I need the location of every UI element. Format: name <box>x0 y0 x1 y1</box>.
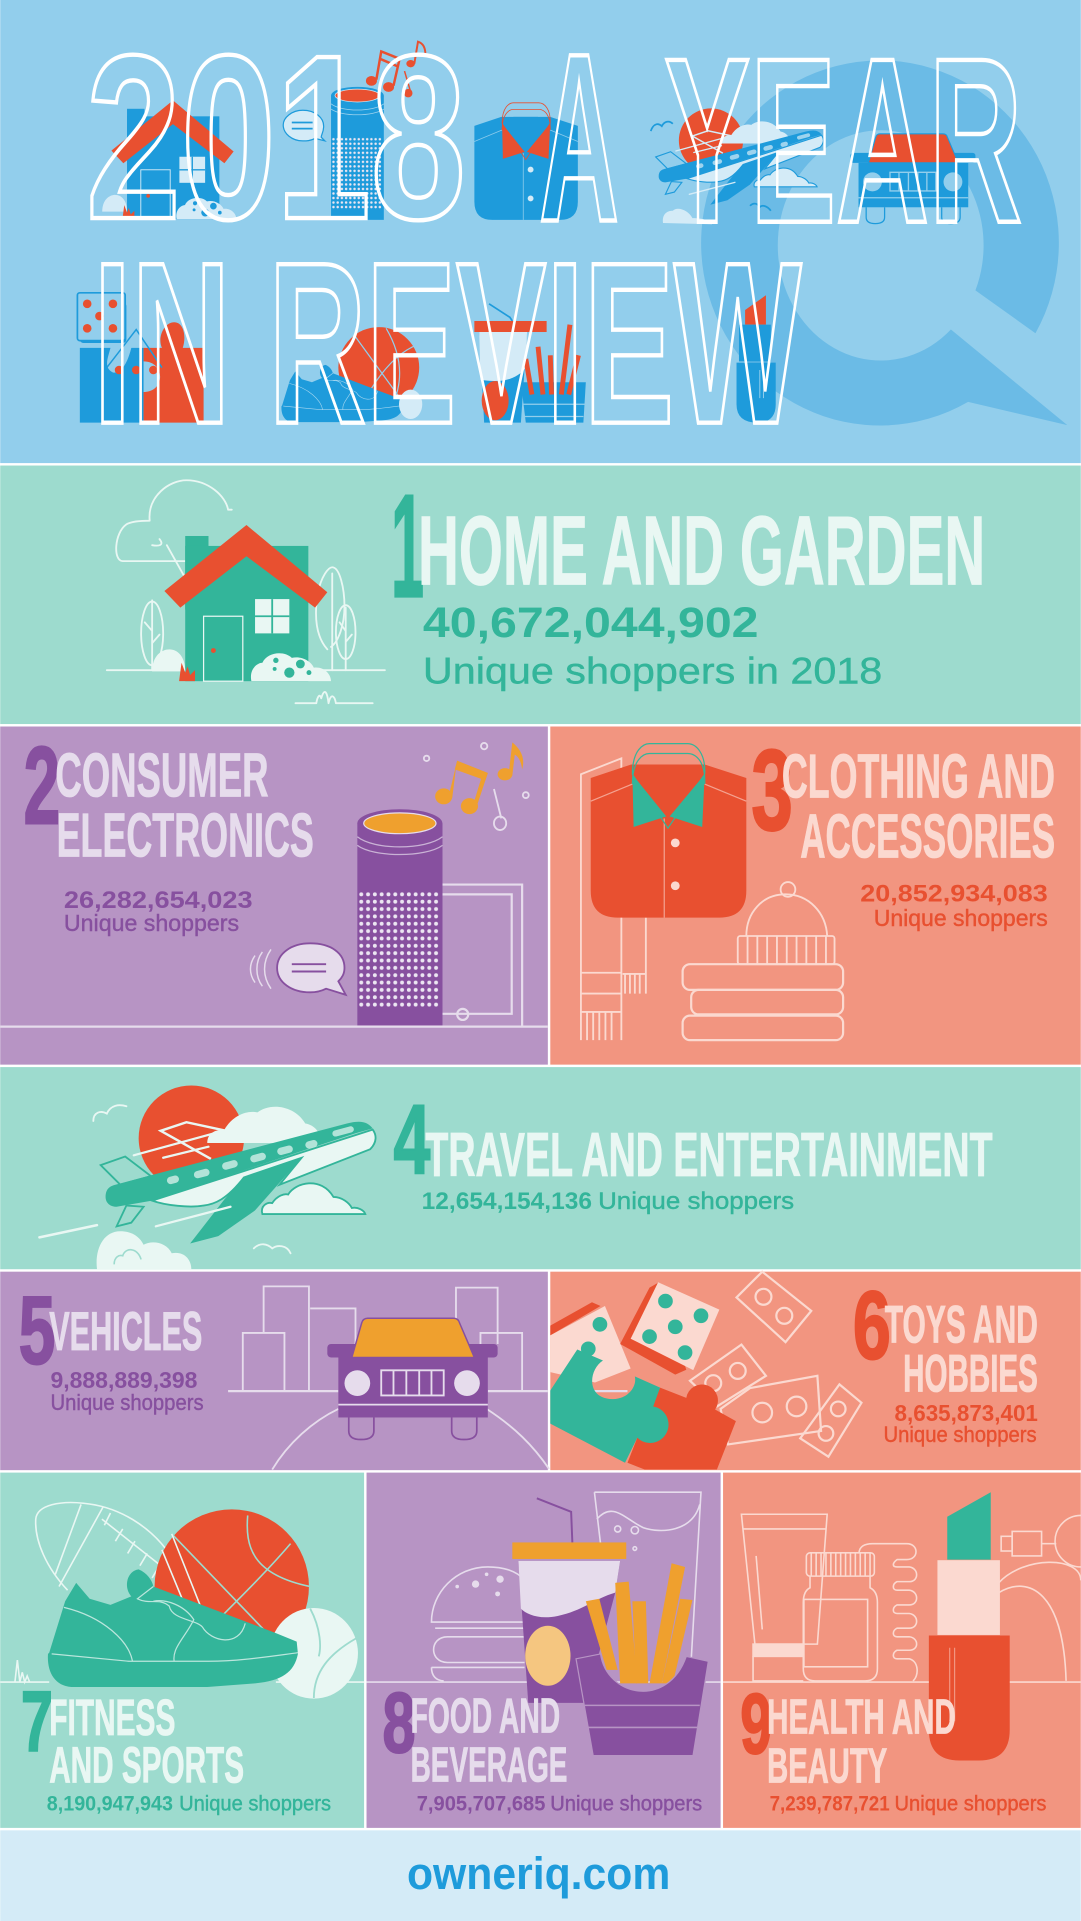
illustration: fries <box>586 1563 692 1683</box>
illustration: fries box <box>576 1654 708 1756</box>
heading <box>767 1691 956 1794</box>
panel background <box>0 466 1081 724</box>
illustration: folded clothes <box>683 964 843 1040</box>
rank number 2: 2 <box>23 724 60 847</box>
website address: owneriq.com <box>407 1848 670 1899</box>
illustration: scarf <box>581 758 646 1040</box>
logo: large Q watermark <box>701 60 1067 426</box>
rank number 7: 7 <box>21 1674 53 1770</box>
shopper count and caption <box>770 1793 1046 1816</box>
illustration: birds and speed line <box>39 1105 291 1253</box>
illustration: music notes <box>424 742 529 830</box>
panel background <box>550 727 1081 1065</box>
icon: smart speaker <box>331 87 384 220</box>
illustration: city skyline and road <box>228 1286 549 1470</box>
shopper caption: Unique shoppers <box>874 905 1048 931</box>
shopper count and caption: 12,654,154,136 <box>422 1188 592 1215</box>
panel background <box>550 1272 1081 1470</box>
illustration: left die <box>550 1302 631 1383</box>
panel background <box>0 727 548 1065</box>
shopper count: 8,635,873,401 <box>895 1400 1038 1426</box>
shopper count and caption: Unique shoppers <box>179 1793 331 1816</box>
illustration: ground line <box>367 1681 721 1683</box>
illustration: drink cup <box>512 1542 626 1703</box>
heading <box>782 742 1055 872</box>
illustration: tennis ball <box>270 1608 358 1699</box>
title: 2018 A Year in Review: A <box>539 4 619 272</box>
header icons <box>77 42 975 423</box>
icon: airplane <box>656 108 823 205</box>
illustration: sneaker <box>48 1569 298 1687</box>
illustration: shirt <box>591 744 746 918</box>
icon: birds and small cloud <box>651 122 771 224</box>
heading: VEHICLES <box>49 1300 202 1362</box>
illustration: perfume bottle <box>999 1515 1081 1681</box>
illustration: smart speaker <box>357 809 442 1025</box>
heading <box>55 740 314 870</box>
icon: lipstick <box>737 295 776 423</box>
illustration: burger <box>431 1567 525 1681</box>
panel 9: health and beauty <box>723 1473 1081 1828</box>
icon: shirt <box>474 103 578 220</box>
panel background <box>367 1473 721 1828</box>
rank number 9: 9 <box>740 1676 772 1772</box>
heading <box>885 1296 1038 1404</box>
panel 2: consumer electronics <box>0 724 548 1065</box>
illustration: orange puzzle piece <box>627 1384 736 1470</box>
illustration: lipstick <box>929 1492 1010 1761</box>
title: 2018 A Year in Review: 2018 <box>86 6 466 268</box>
shopper caption: Unique shoppers <box>64 910 239 936</box>
illustration: trees and ground <box>107 480 385 703</box>
rank number 4: 4 <box>393 1085 430 1195</box>
header background <box>0 0 1081 463</box>
illustration: lower cloud <box>97 1231 191 1269</box>
panel background <box>0 1272 548 1470</box>
illustration: right die <box>620 1282 719 1375</box>
icon: music notes <box>366 42 425 97</box>
rank number 6: 6 <box>853 1271 891 1380</box>
shopper count: 26,282,654,023 <box>64 887 253 914</box>
rank number 3: 3 <box>751 726 793 854</box>
illustration: wavy comb bottle <box>859 1544 917 1681</box>
panel background <box>0 1067 1081 1269</box>
shopper count: 9,888,889,398 <box>50 1367 198 1393</box>
panel background <box>0 1473 364 1828</box>
shopper count and caption: 8,190,947,943 <box>47 1793 173 1816</box>
illustration: ground line and pulse <box>0 1660 364 1682</box>
illustration: basketball <box>155 1509 310 1664</box>
shopper count: 40,672,044,902 <box>423 599 759 647</box>
icon: drink and fries <box>474 304 586 423</box>
shopper count and caption <box>417 1793 702 1816</box>
shopper caption: Unique shoppers <box>884 1422 1037 1447</box>
illustration: straw <box>537 1498 572 1542</box>
heading: AND SPORTS <box>49 1736 244 1794</box>
illustration: pill bottle <box>803 1553 877 1681</box>
heading: HEALTH AND <box>767 1691 956 1745</box>
rank number 5: 5 <box>19 1276 55 1385</box>
shopper count and caption: 7,239,787,721 <box>770 1793 890 1816</box>
illustration: water glass <box>594 1492 701 1681</box>
icon: puzzle pieces <box>80 322 204 423</box>
illustration: toy bricks <box>690 1272 861 1457</box>
shopper count and caption: Unique shoppers <box>550 1793 702 1816</box>
heading: CONSUMER <box>55 740 269 810</box>
heading: FITNESS <box>49 1688 175 1746</box>
shopper count and caption: Unique shoppers <box>895 1793 1046 1816</box>
illustration: cosmetic tube <box>741 1514 827 1681</box>
panel 4: travel and entertainment <box>0 1067 1081 1269</box>
heading: ELECTRONICS <box>57 800 314 870</box>
shopper caption: Unique shoppers <box>50 1390 204 1415</box>
icon: car <box>850 134 975 224</box>
illustration: ground line <box>550 1390 627 1392</box>
panel background <box>723 1473 1081 1828</box>
shopper count and caption <box>422 1188 794 1215</box>
panel 7: fitness and sports <box>0 1473 364 1828</box>
panel 3: clothing and accessories <box>550 726 1081 1065</box>
illustration: house <box>152 525 331 681</box>
icon: house <box>102 100 236 219</box>
panel 1: home and garden <box>0 465 1081 724</box>
title: 2018 A Year in Review: IN <box>93 214 231 472</box>
icon: speech bubble <box>283 110 325 141</box>
title: 2018 A Year in Review <box>86 4 1022 472</box>
heading <box>411 1689 567 1792</box>
panel 6: toys and hobbies <box>550 1271 1081 1470</box>
footer <box>0 1830 1081 1921</box>
shopper count and caption: Unique shoppers <box>598 1188 794 1215</box>
rank number 8: 8 <box>382 1675 416 1771</box>
heading: BEAUTY <box>767 1740 887 1794</box>
illustration: car <box>327 1318 498 1440</box>
illustration: tablet and shelf <box>0 885 548 1027</box>
shopper count and caption <box>47 1793 331 1816</box>
illustration: ground line <box>723 1681 1081 1683</box>
illustration: football <box>36 1503 178 1590</box>
illustration: speech bubble <box>250 943 346 995</box>
panel 8: food and beverage <box>367 1473 721 1828</box>
panel 5: vehicles <box>0 1272 549 1470</box>
illustration: airplane with sun and clouds <box>101 1085 376 1244</box>
icon: sneaker and basketball <box>281 327 423 422</box>
shopper count: 20,852,934,083 <box>860 881 1048 908</box>
heading: BEVERAGE <box>411 1738 567 1792</box>
icon: dice <box>77 293 162 374</box>
shopper caption: Unique shoppers in 2018 <box>423 651 882 692</box>
panel 1: home and garden: 1 <box>391 465 424 629</box>
footer background <box>0 1830 1081 1921</box>
heading: FOOD AND <box>411 1689 560 1743</box>
illustration: teal puzzle piece <box>550 1349 669 1463</box>
illustration: hat <box>738 882 835 964</box>
shopper count and caption: 7,905,707,685 <box>417 1793 545 1816</box>
heading <box>49 1688 244 1794</box>
